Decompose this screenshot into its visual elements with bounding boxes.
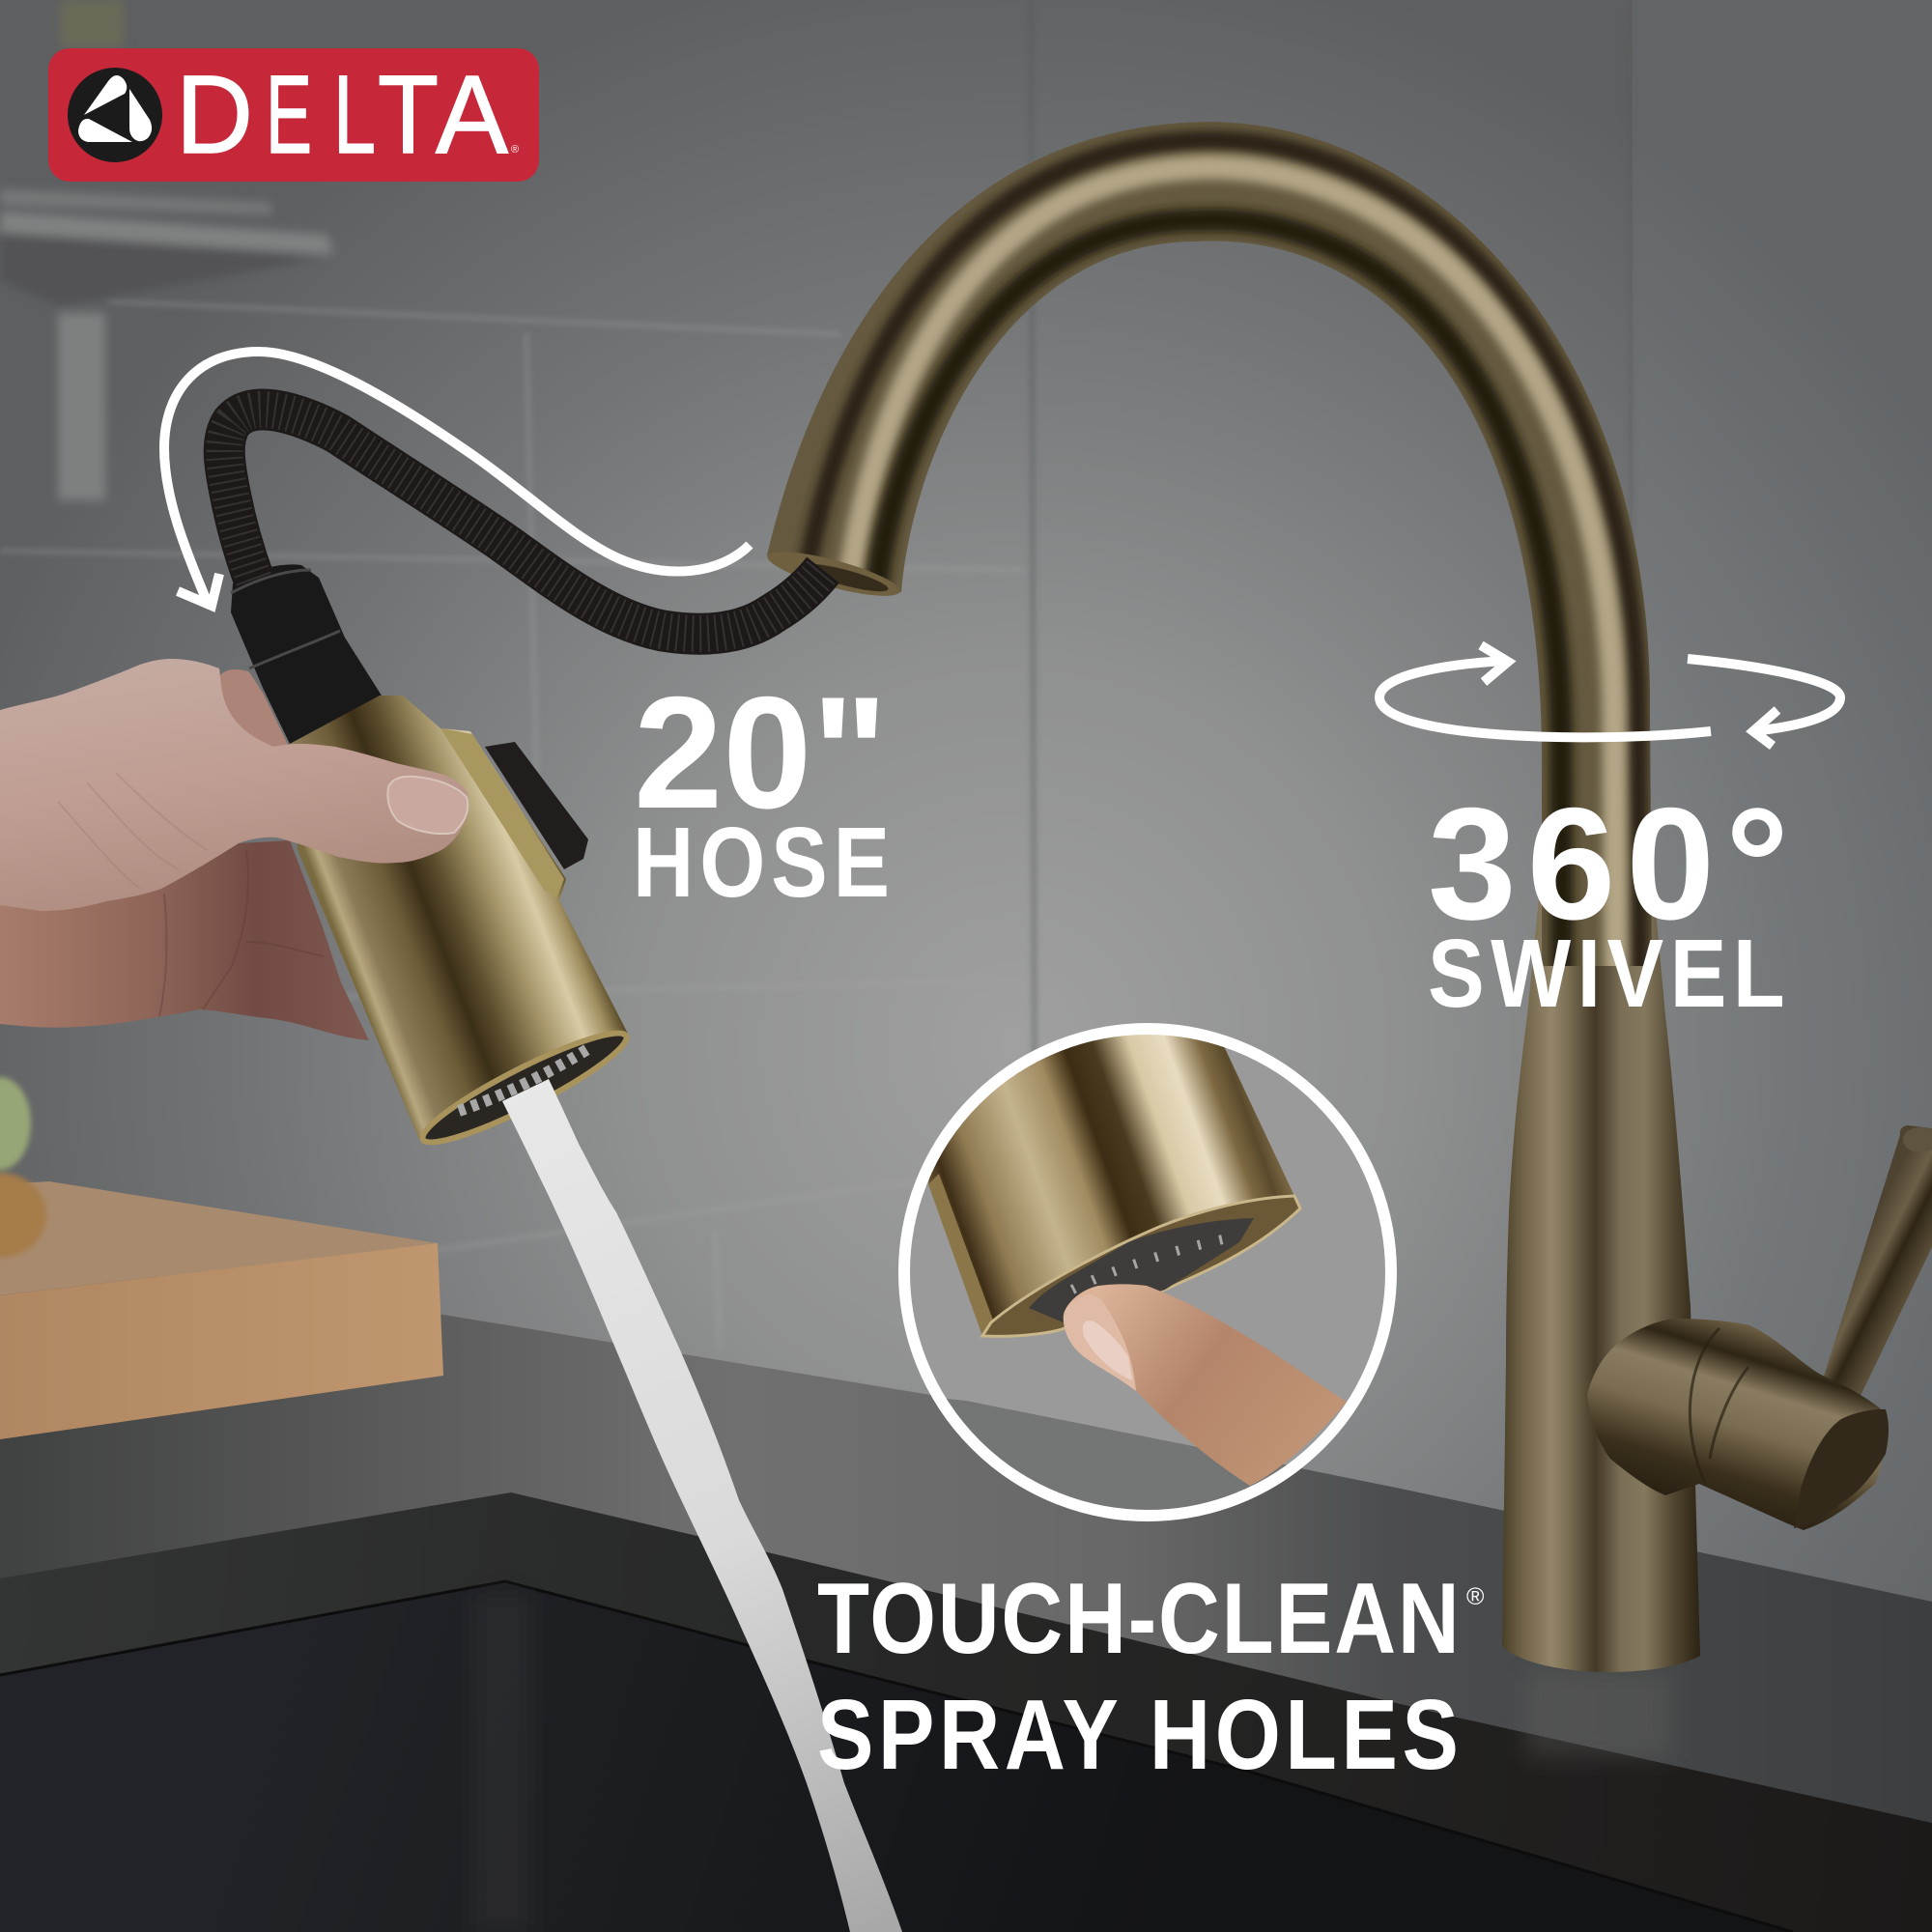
palm creases: [159, 850, 324, 1016]
logo: Delta: [48, 48, 539, 182]
logo wordmark: E: [266, 53, 312, 177]
text: 360 degree swivel: 360°: [1428, 775, 1789, 952]
logo emblem: [68, 68, 162, 162]
braided hose: [224, 410, 823, 634]
text: 20 inch hose: [633, 664, 890, 919]
spout outlet: [764, 543, 903, 605]
callout: 20 inch hose arrow: [164, 352, 750, 606]
rocker switch: [485, 742, 588, 869]
left edge band: [928, 1174, 995, 1336]
text: touch-clean spray holes: SPRAY HOLES: [817, 1679, 1459, 1791]
lever end cap: [1794, 1409, 1889, 1528]
distant bottle: [60, 0, 124, 47]
fingertip: [1064, 1294, 1136, 1391]
logo wordmark: L: [333, 53, 376, 177]
sink basin: [0, 1581, 1793, 1932]
text: touch-clean spray holes: ®: [1466, 1583, 1485, 1610]
sink rim: [0, 1492, 1932, 1932]
inset circle: touch-clean detail: [898, 1023, 1397, 1521]
thumbnail: [387, 777, 468, 834]
fingernail: [1083, 1321, 1132, 1380]
text: 360 degree swivel: SWIVEL: [1428, 920, 1785, 1027]
text: touch-clean spray holes: TOUCH-CLEAN: [817, 1563, 1460, 1675]
hose connector: [231, 564, 382, 744]
faucet body and arched spout: [764, 122, 1719, 1690]
logo wordmark: T: [378, 53, 439, 177]
lever: [1821, 1125, 1932, 1402]
wall tile joints: [0, 0, 1633, 1391]
text: 20 inch hose: HOSE: [633, 807, 890, 919]
spout shading: [808, 140, 1639, 966]
lever hub: [1587, 1319, 1889, 1530]
pull-down spray head: [0, 564, 635, 1156]
faucet base cone: [1502, 900, 1700, 1672]
counter in inset: [947, 1399, 1287, 1510]
sprayer ridge: [440, 728, 564, 898]
spray face: [414, 1019, 635, 1156]
water stream: [502, 1079, 902, 1932]
logo wordmark: [176, 53, 508, 177]
hand holding sprayer: [0, 659, 469, 911]
finger: [1064, 1284, 1347, 1486]
handle and lever: [1587, 1125, 1932, 1530]
logo wordmark: A: [436, 53, 508, 177]
lower hand behind head: [0, 840, 369, 1040]
logo: Delta: ®: [511, 144, 519, 156]
logo wordmark: D: [176, 53, 253, 177]
index finger: [219, 669, 290, 763]
fruit at left edge: [0, 1077, 46, 1258]
text: touch-clean spray holes: [817, 1563, 1485, 1791]
arched spout: [767, 122, 1652, 966]
aerator face: [1029, 1218, 1254, 1323]
nozzle rim: [982, 1196, 1300, 1336]
callout: swivel arrows: [1379, 645, 1840, 746]
nozzle: [928, 1035, 1294, 1320]
text: 20 inch hose: 20": [634, 664, 888, 841]
right wall lighter panel: [1633, 0, 1932, 1604]
shelf: [0, 189, 333, 500]
countertop: [0, 1256, 1932, 1932]
knuckle creases: [58, 773, 208, 889]
hub seam: [1690, 1328, 1748, 1483]
faucet reflection on counter: [1526, 1671, 1671, 1758]
cutting board: [0, 1181, 443, 1439]
